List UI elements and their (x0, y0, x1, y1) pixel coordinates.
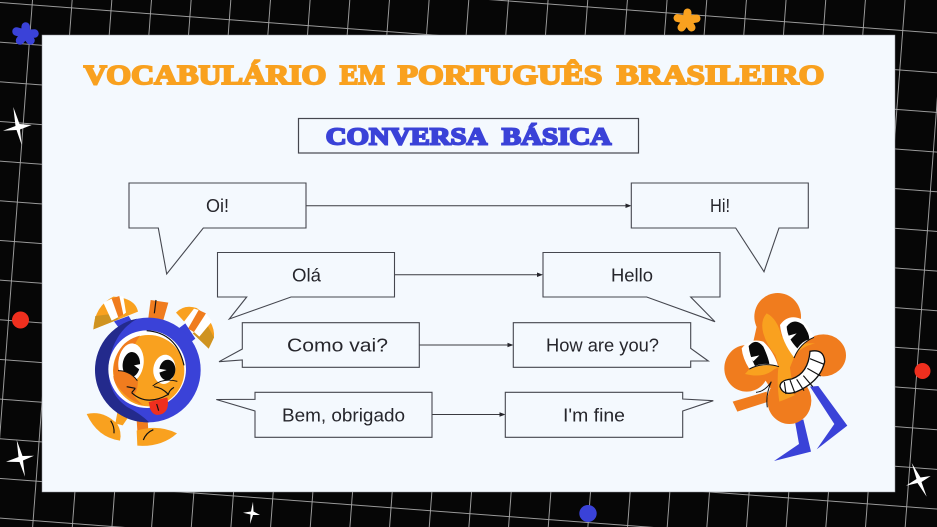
subtitle: CONVERSA (326, 123, 488, 150)
speech bubble: Bem, obrigado (216, 392, 432, 437)
speech bubble: Oi! (129, 183, 306, 274)
speech bubble: How are you? (513, 323, 708, 367)
panel: main white card (42, 35, 895, 492)
clover stem (733, 392, 768, 412)
clock face shade (113, 336, 143, 405)
icon: orange flower (678, 12, 696, 28)
clock body (96, 318, 201, 422)
clover center shade (790, 366, 807, 379)
title: VOCABULÁRIO (84, 59, 326, 90)
clover left eye (742, 340, 779, 369)
clover stem crease (756, 382, 771, 407)
speech bubble: Hi! (631, 183, 808, 272)
title (84, 59, 824, 90)
subtitle: BÁSICA (502, 122, 612, 150)
clover right eye (780, 317, 814, 358)
speech bubble: Olá (218, 252, 394, 319)
speech bubble: I'm fine (505, 392, 713, 437)
speech bubble: How are you?: How are you? (546, 336, 659, 356)
speech bubble: Como vai?: Como vai? (287, 336, 388, 356)
clock legs and feet (87, 413, 177, 446)
subtitle (326, 122, 612, 150)
clover legs (774, 386, 847, 461)
icon: red dot right (914, 363, 930, 379)
clock bells (93, 296, 214, 349)
icon: red dot left (12, 312, 29, 328)
clock face (113, 335, 184, 406)
speech bubble: I'm fine: I'm fine (563, 406, 625, 426)
title: BRASILEIRO (617, 59, 824, 90)
icon: blue dot bottom (579, 505, 597, 522)
character: clover (724, 293, 847, 461)
clover body lobes (724, 293, 846, 424)
speech bubble: Hello (543, 252, 720, 322)
speech bubble: Hi!: Hi! (710, 196, 730, 216)
arrow: Bem obrigado to I'm fine (432, 412, 506, 417)
title: EM (340, 59, 385, 90)
clock brows (118, 371, 177, 386)
arrow: Olá to Hello (394, 272, 543, 277)
arrow: Oi to Hi (306, 204, 632, 208)
clock body shadow (95, 319, 149, 422)
speech bubble: Bem, obrigado: Bem, obrigado (282, 406, 405, 426)
icon: sparkle bottom (243, 502, 260, 524)
speech bubble: Olá: Olá (292, 266, 322, 286)
title: PORTUGUÊS (398, 59, 602, 90)
icon: blue flower (16, 26, 34, 40)
clover grin (780, 351, 825, 394)
clock eyes (116, 342, 177, 385)
icon: sparkle left (3, 107, 32, 145)
icon: sparkle right (906, 463, 931, 497)
speech bubble: Como vai? (219, 323, 419, 367)
character: alarm clock (87, 296, 214, 446)
icon: sparkle bottom left (6, 440, 34, 477)
arrow: Como vai to How are you (419, 343, 514, 347)
speech bubble: Hello: Hello (611, 266, 653, 286)
subtitle box (298, 118, 638, 153)
clock smile (127, 387, 174, 411)
clock tongue (149, 397, 168, 415)
clock face outline (147, 331, 184, 365)
clock cheek (113, 371, 138, 395)
speech bubble: Oi!: Oi! (206, 196, 229, 216)
clock white ring (108, 330, 186, 408)
clover highlight (745, 313, 815, 402)
